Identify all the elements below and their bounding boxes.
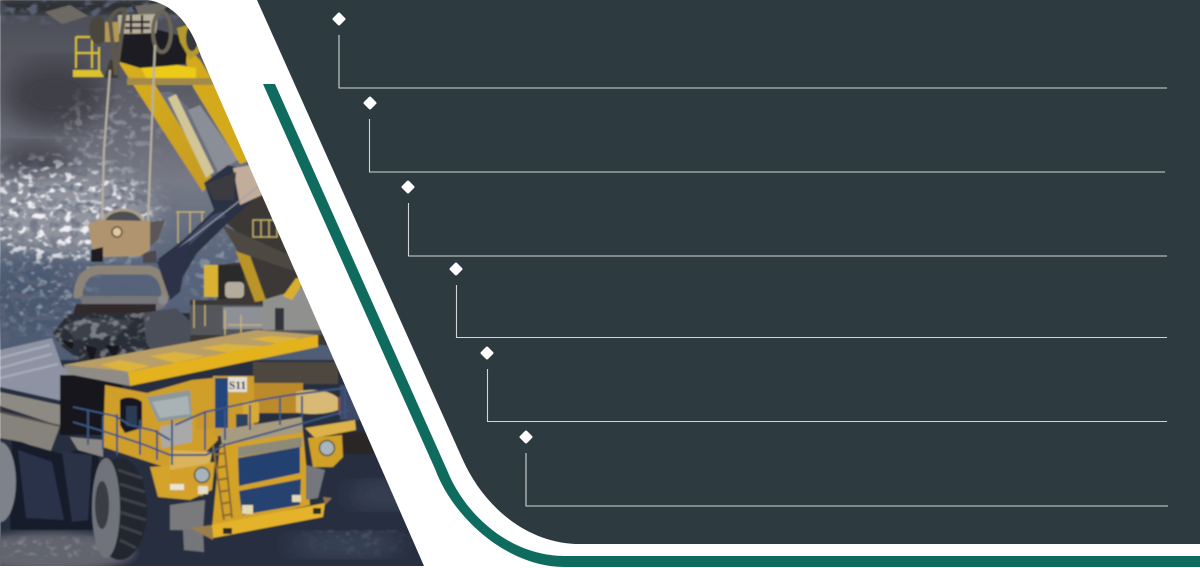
truck chassis underside (10, 375, 122, 530)
photo: mining excavator loading a yellow haul truck (0, 0, 430, 568)
truck front grille (212, 432, 310, 528)
list item 2 marker and connector (363, 96, 1165, 172)
list item 5 marker and connector (480, 346, 1167, 422)
truck ladder (213, 443, 232, 520)
truck dump bed (0, 338, 76, 453)
truck rear wheel left (0, 442, 16, 522)
truck hood deck (220, 417, 303, 445)
truck equipment behind cab (253, 362, 360, 420)
list item 1 marker and connector (332, 12, 1167, 88)
excavator boom (73, 9, 251, 192)
truck lower body (170, 500, 213, 552)
truck equipment box with sign: S11 (229, 380, 246, 392)
bucket frame (72, 240, 190, 318)
pulley block (88, 210, 165, 263)
list item 6 marker and connector (519, 430, 1168, 506)
list item 4 marker and connector (449, 262, 1167, 338)
panel: dark content panel (257, 0, 1200, 544)
truck cab (70, 378, 218, 500)
accent: green swoosh band (263, 84, 1200, 567)
truck bumper (212, 497, 332, 538)
list item 3 marker and connector (401, 180, 1167, 256)
truck rear wheel (92, 458, 147, 560)
hoist cables (102, 45, 155, 222)
excavator dark arm (157, 165, 263, 287)
rock face hillside (0, 0, 334, 361)
bucket with coal (52, 308, 190, 361)
truck equipment box with sign (213, 376, 259, 436)
truck left fender and headlight (170, 450, 212, 496)
truck canopy (63, 330, 318, 386)
truck blue railing (73, 388, 350, 465)
excavator machinery body (175, 160, 328, 346)
ground (0, 360, 430, 568)
truck right fender and headlight (305, 420, 356, 500)
